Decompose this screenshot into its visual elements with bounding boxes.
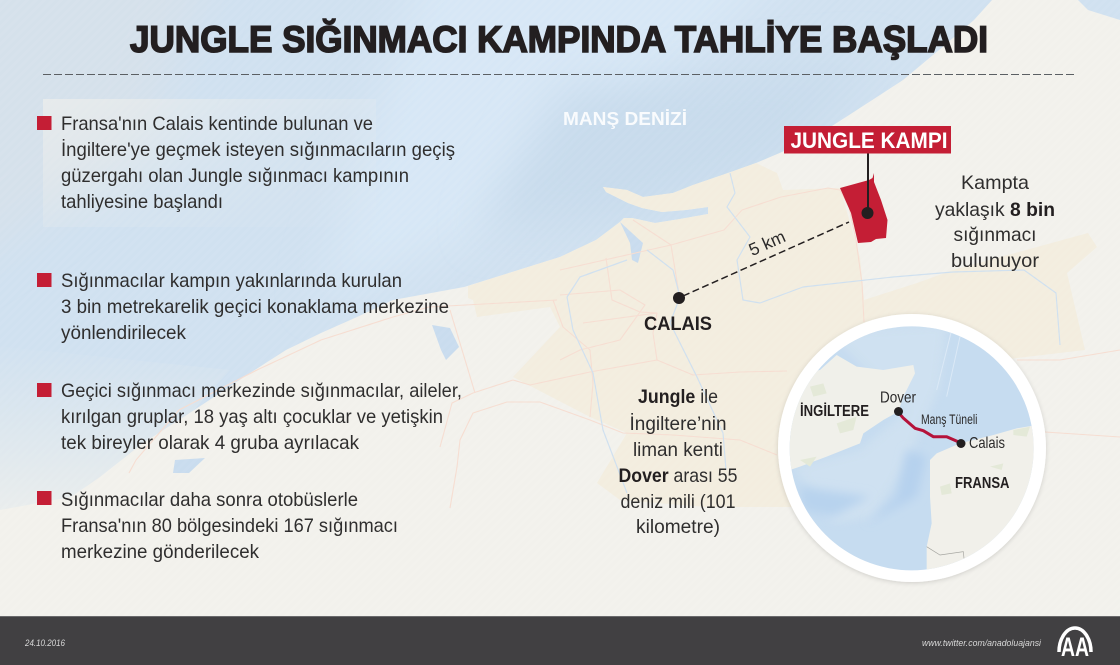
bullet block 4 xyxy=(37,489,398,563)
sea label: MANŞ DENİZİ xyxy=(563,108,687,129)
bullet block 1 xyxy=(37,113,455,213)
Dover distance note: Dover arası 55 xyxy=(618,465,738,487)
bullet text 1: güzergahı olan Jungle sığınmacı kampının xyxy=(61,165,409,187)
bullet block 2 xyxy=(37,270,449,344)
Dover distance note: kilometre) xyxy=(636,516,720,538)
camp marker xyxy=(862,207,874,219)
Dover distance note: Jungle ile xyxy=(638,386,718,408)
bullet text 2: Sığınmacılar kampın yakınlarında kurulan xyxy=(61,270,402,292)
distance label: 5 km xyxy=(746,226,788,260)
camp population note: yaklaşık 8 bin xyxy=(935,199,1055,221)
tunnel label: Manş Tüneli xyxy=(921,412,978,427)
sea tonal streaks xyxy=(0,391,205,510)
rivers xyxy=(567,173,1060,493)
bullet square 2 xyxy=(37,273,52,287)
bullet text 1: tahliyesine başlandı xyxy=(61,191,223,213)
bullet block 3 xyxy=(37,380,462,454)
England label: İNGİLTERE xyxy=(800,402,869,420)
camp label: JUNGLE KAMPI xyxy=(790,128,948,153)
Dover label: Dover xyxy=(880,390,917,406)
camp leader line xyxy=(867,153,869,213)
bullet text 1: İngiltere'ye geçmek isteyen sığınmacıların geçiş xyxy=(61,138,455,161)
logo: Anadolu Agency xyxy=(1059,628,1091,662)
bullet text 2: 3 bin metrekarelik geçici konaklama merkezine xyxy=(61,296,449,318)
footer xyxy=(0,616,1120,665)
Dover distance note xyxy=(618,386,738,538)
camp population note: sığınmacı xyxy=(954,224,1036,246)
title: JUNGLE SIĞINMACI KAMPINDA TAHLİYE BAŞLADI xyxy=(130,19,988,60)
map background xyxy=(0,0,1120,509)
Calais marker xyxy=(673,292,685,304)
Calais inset label: Calais xyxy=(969,435,1005,452)
inset map xyxy=(778,314,1047,583)
bullet text 3: kırılgan gruplar, 18 yaş altı çocuklar ve yetişkin xyxy=(61,406,443,428)
bullet text 3: Geçici sığınmacı merkezinde sığınmacılar, aileler, xyxy=(61,380,462,402)
France label: FRANSA xyxy=(955,475,1010,492)
inset white ring xyxy=(778,314,1046,582)
Dover distance note: İngiltere’nin xyxy=(630,412,726,435)
bullet text 3 xyxy=(61,380,462,454)
bullet text 4 xyxy=(61,489,398,563)
bullet text 1: Fransa'nın Calais kentinde bulunan ve xyxy=(61,113,373,135)
bullet square 1 xyxy=(37,116,52,130)
camp population note: bulunuyor xyxy=(951,250,1040,272)
logo: Anadolu Agency: AA xyxy=(1061,632,1089,662)
camp area xyxy=(840,173,888,243)
Calais label: CALAIS xyxy=(644,314,712,335)
date: 24.10.2016 xyxy=(24,638,66,649)
bullet text 4: Fransa'nın 80 bölgesindeki 167 sığınmacı xyxy=(61,515,398,537)
camp population note xyxy=(935,172,1055,272)
inlet xyxy=(620,222,643,263)
bullet text 3: tek bireyler olarak 4 gruba ayrılacak xyxy=(61,432,359,454)
bullet text 2 xyxy=(61,270,449,344)
bullet text 4: merkezine gönderilecek xyxy=(61,541,259,563)
Dover marker xyxy=(894,407,903,416)
distance line xyxy=(683,222,849,296)
Dover distance note: deniz mili (101 xyxy=(620,491,736,513)
Calais inset marker xyxy=(956,439,966,448)
tunnel route xyxy=(898,412,961,443)
bullet text 2: yönlendirilecek xyxy=(61,322,186,344)
Dover distance note: liman kenti xyxy=(633,439,723,461)
twitter url: www.twitter.com/anadoluajansi xyxy=(922,638,1042,649)
roads xyxy=(129,188,1120,508)
camp population note: Kampta xyxy=(961,172,1029,194)
bullet square 4 xyxy=(37,491,52,505)
light panel behind first bullet xyxy=(43,99,376,227)
bullet square 3 xyxy=(37,383,52,397)
lakes xyxy=(173,325,459,473)
footer bar xyxy=(0,616,1120,665)
bullet text 4: Sığınmacılar daha sonra otobüslerle xyxy=(61,489,358,511)
bullet text 1 xyxy=(61,113,455,213)
city area (tan) xyxy=(468,163,1097,507)
inset map shapes xyxy=(790,326,1034,570)
